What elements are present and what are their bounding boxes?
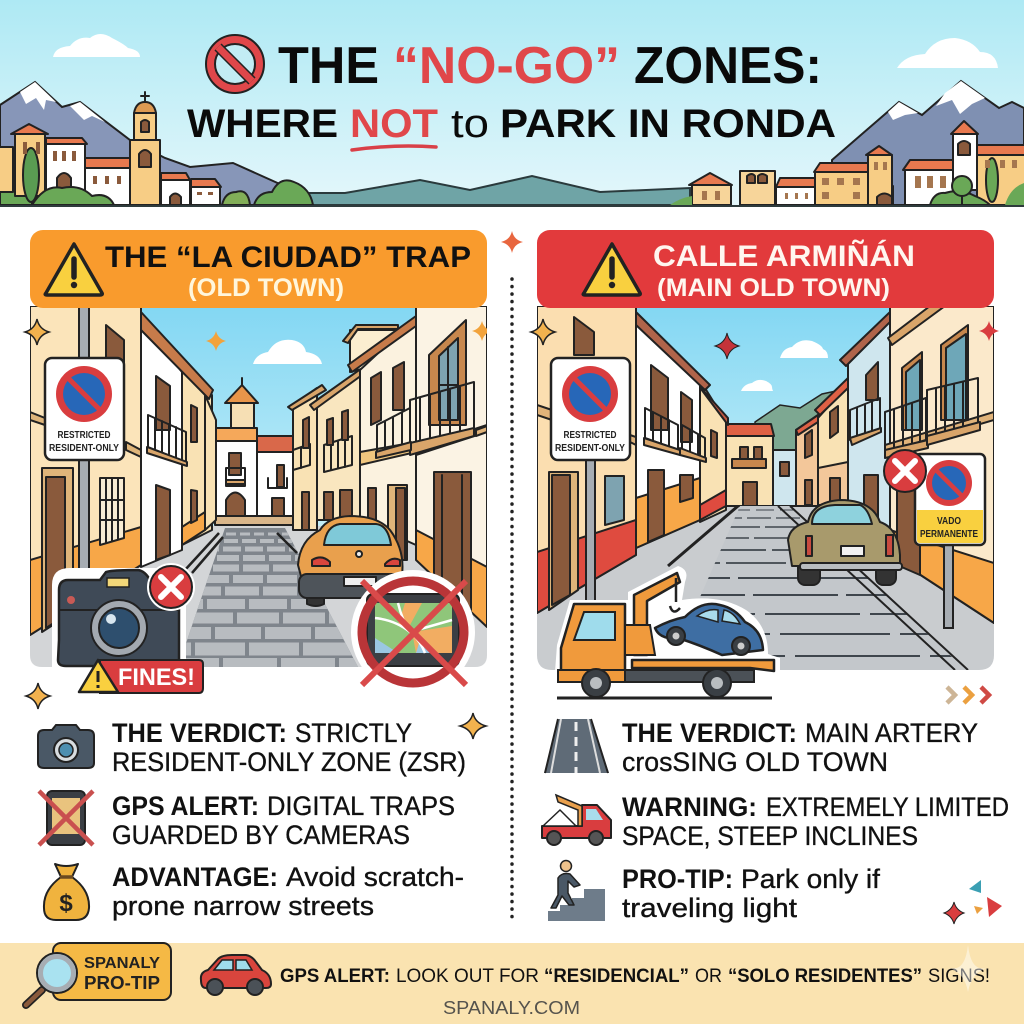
star top left bbox=[25, 319, 49, 345]
fines badge: FINES! bbox=[118, 664, 195, 691]
cloud right bbox=[897, 38, 998, 68]
star bbox=[206, 331, 226, 351]
section banner: La Ciudad bbox=[30, 230, 487, 308]
tall window bbox=[429, 320, 466, 425]
balconies bbox=[410, 382, 474, 447]
cloud left bbox=[53, 34, 140, 57]
parking sign: restricted resident-only: RESTRICTED bbox=[58, 429, 111, 441]
parked orange car bbox=[298, 516, 402, 606]
icon: road bbox=[544, 719, 609, 773]
icon: money bag: $ bbox=[59, 890, 73, 917]
panel: La Ciudad trap bbox=[25, 230, 492, 694]
decorative confetti bbox=[944, 880, 1002, 924]
title: to bbox=[451, 102, 489, 146]
left town bbox=[0, 92, 313, 205]
parking sign: restricted resident-only: RESIDENT-ONLY bbox=[49, 442, 119, 454]
dotted divider bbox=[510, 279, 514, 922]
right bullet: pro-tip: PRO-TIP: bbox=[622, 864, 733, 894]
street scene: old town bbox=[30, 306, 492, 667]
sparkle bbox=[950, 945, 986, 992]
right mountains bbox=[832, 81, 1024, 205]
left bullet: advantage bbox=[44, 862, 464, 921]
footer alert text: LOOK OUT FOR bbox=[396, 966, 539, 987]
title: “NO-GO” bbox=[393, 37, 620, 95]
balconies bbox=[645, 408, 678, 450]
fines badge bbox=[79, 660, 203, 693]
right wall buildings bbox=[796, 306, 994, 623]
star top right bbox=[979, 321, 999, 341]
door left bbox=[42, 468, 73, 632]
far houses bbox=[726, 424, 797, 506]
left bullet: GPS alert bbox=[39, 791, 455, 850]
footer alert text bbox=[280, 966, 990, 987]
pro-tip badge bbox=[26, 943, 171, 1005]
stone road bbox=[660, 506, 980, 670]
right bullet: warning bbox=[542, 792, 1009, 851]
parking sign: vado permanente bbox=[915, 454, 985, 628]
distant mountain bbox=[754, 390, 834, 449]
star bbox=[472, 321, 487, 341]
icon: red X badge bbox=[884, 450, 926, 492]
icon: crossed-out GPS bbox=[351, 570, 475, 694]
left wall buildings bbox=[30, 306, 216, 635]
underline on NOT bbox=[352, 146, 436, 150]
icon: warning triangle bbox=[45, 244, 102, 295]
right bullet: the verdict: MAIN ARTERY bbox=[805, 718, 978, 748]
title: NOT bbox=[350, 102, 438, 146]
section banner: La Ciudad: (OLD TOWN) bbox=[188, 274, 344, 302]
pro-tip badge: SPANALY bbox=[84, 955, 160, 972]
window grille bbox=[100, 478, 124, 545]
footer alert text: SIGNS! bbox=[928, 966, 990, 987]
right bullet: the verdict: crosSING OLD TOWN bbox=[622, 747, 888, 777]
right bullet: pro-tip bbox=[548, 860, 881, 923]
icon: magnifying glass bbox=[26, 953, 77, 1005]
parked vintage car bbox=[788, 500, 902, 585]
right bullet: the verdict: THE VERDICT: bbox=[622, 718, 797, 748]
chevrons bbox=[947, 687, 989, 703]
title: PARK IN RONDA bbox=[500, 102, 836, 146]
left bullet: the verdict: THE VERDICT: bbox=[112, 718, 287, 748]
header banner with Ronda skyline bbox=[0, 0, 1024, 207]
section banner: La Ciudad: THE “LA CIUDAD” TRAP bbox=[105, 241, 471, 274]
doors bbox=[324, 488, 376, 520]
doors and windows bbox=[549, 472, 578, 610]
left bullet: the verdict bbox=[38, 718, 466, 777]
icon: warning triangle bbox=[583, 244, 640, 295]
section banner: Calle Arminan: CALLE ARMIÑÁN bbox=[653, 239, 915, 273]
title: THE bbox=[278, 37, 379, 95]
far church bbox=[215, 378, 293, 525]
left bullet: advantage: ADVANTAGE: bbox=[112, 862, 278, 892]
parking sign: restricted resident-only bbox=[45, 306, 124, 606]
title: WHERE bbox=[187, 102, 338, 146]
star on divider bbox=[501, 231, 523, 253]
right bullet: the verdict bbox=[544, 718, 978, 777]
right town bbox=[689, 121, 1024, 205]
parking sign: vado permanente: PERMANENTE bbox=[920, 528, 978, 540]
pro-tip badge: PRO-TIP bbox=[84, 973, 160, 993]
teal hills bbox=[300, 176, 690, 205]
section banner: Calle Arminan bbox=[537, 230, 994, 308]
footer alert text: OR bbox=[695, 966, 722, 987]
cloud bbox=[741, 380, 773, 391]
parking sign: restricted resident-only bbox=[551, 358, 630, 625]
icon: prohibition sign bbox=[206, 35, 264, 93]
left bullet: the verdict: STRICTLY bbox=[295, 718, 412, 748]
cobbled road bbox=[185, 528, 358, 667]
icon: red car bbox=[201, 955, 271, 995]
left mountains bbox=[0, 82, 282, 205]
icon: red tow truck bbox=[542, 795, 611, 845]
icon: camera with X bbox=[52, 563, 195, 670]
footer alert text: “SOLO RESIDENTES” bbox=[728, 966, 922, 987]
left bullet: advantage: Avoid scratch- bbox=[286, 862, 464, 892]
footer alert text: GPS ALERT: bbox=[280, 966, 390, 987]
parking sign: restricted resident-only: RESTRICTED bbox=[564, 429, 617, 441]
left bullet: GPS alert: GPS ALERT: bbox=[112, 791, 259, 821]
parking sign: restricted resident-only: RESIDENT-ONLY bbox=[555, 442, 625, 454]
star bbox=[715, 333, 739, 359]
title: ZONES: bbox=[634, 37, 822, 95]
icon: money bag bbox=[44, 864, 89, 920]
right bullet: warning: SPACE, STEEP INCLINES bbox=[622, 821, 918, 851]
left bullet: GPS alert: GUARDED BY CAMERAS bbox=[112, 820, 410, 850]
left bullet: advantage: prone narrow streets bbox=[112, 891, 374, 921]
footer alert text: “RESIDENCIAL” bbox=[544, 966, 689, 987]
left wall buildings bbox=[537, 306, 728, 613]
left bullet: the verdict: RESIDENT-ONLY ZONE (ZSR) bbox=[112, 747, 466, 777]
tow truck with blue car bbox=[555, 566, 780, 698]
icon: crossed phone bbox=[39, 791, 93, 845]
right wall buildings bbox=[288, 306, 487, 627]
star left mid bbox=[26, 683, 50, 709]
panel: Calle Arminan bbox=[531, 230, 999, 703]
parking sign: vado permanente: VADO bbox=[937, 515, 961, 527]
star top left bbox=[531, 319, 555, 345]
title bbox=[187, 35, 836, 150]
right bullet: pro-tip: Park only if bbox=[741, 864, 881, 894]
right bullet: warning: WARNING: bbox=[622, 792, 757, 822]
right bullet: pro-tip: traveling light bbox=[622, 893, 798, 923]
street scene: main old town bbox=[537, 306, 994, 670]
icon: person climbing stairs bbox=[548, 860, 605, 921]
star right of text bbox=[460, 713, 486, 739]
website: SPANALY.COM bbox=[443, 998, 580, 1018]
towed blue car bbox=[655, 604, 763, 655]
section banner: Calle Arminan: (MAIN OLD TOWN) bbox=[657, 274, 890, 302]
balcony left bbox=[148, 415, 186, 462]
left bullet: GPS alert: DIGITAL TRAPS bbox=[267, 791, 455, 821]
icon: camera bbox=[38, 725, 94, 768]
cloud bbox=[780, 340, 828, 358]
upper windows bbox=[371, 372, 381, 425]
cloud bbox=[253, 340, 322, 364]
left town windows bbox=[23, 142, 213, 195]
footer band bbox=[0, 943, 1024, 1024]
